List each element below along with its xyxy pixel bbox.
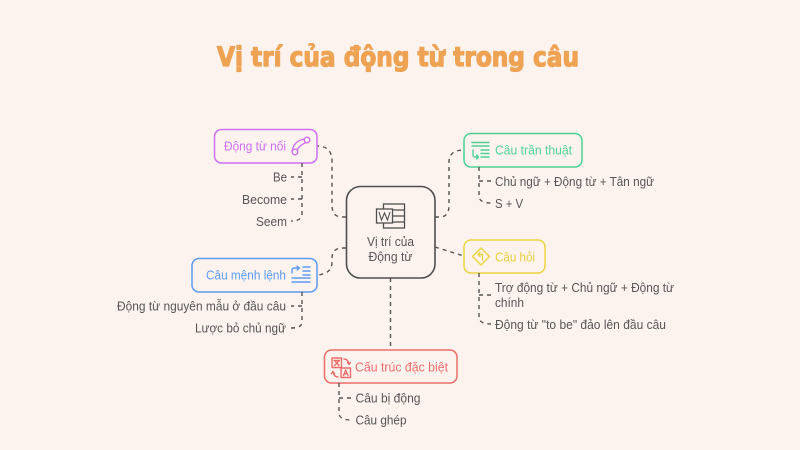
heading: Cấu trúc đặc biệt: Cấu trúc đặc biệt [355,360,448,374]
panel: Cấu trúc đặc biệt [324,350,457,428]
icon: curve [292,137,310,155]
central label: Động từ [368,249,413,264]
item: Chủ ngữ + Động từ + Tân ngữ: Chủ ngữ + Động từ + Tân ngữ [495,174,654,189]
panel: Câu mệnh lệnh [117,258,317,336]
connector: Câu hỏi items [479,273,491,324]
icon: translate [332,358,350,378]
icon: list with arrow [292,266,310,282]
item: S + V: S + V [495,196,523,211]
item: Be: Be [273,170,287,184]
item: Câu bị động: Câu bị động [356,390,420,406]
central node [346,186,435,278]
item: Động từ "to be" đảo lên đầu câu: Động từ "to be" đảo lên đầu câu [495,317,666,332]
heading: Câu mệnh lệnh: Câu mệnh lệnh [206,268,286,282]
connector: Động từ nối items [291,163,302,221]
heading: Câu trần thuật: Câu trần thuật [495,142,572,158]
connectors: centre to branches [317,146,464,350]
central label: Vị trí của [367,234,415,249]
panel: Câu hỏi [464,240,674,332]
item: Become: Become [242,192,287,207]
connector: Cấu trúc đặc biệt items [339,383,351,420]
connector: Câu mệnh lệnh items [291,292,302,328]
item: Lược bỏ chủ ngữ: Lược bỏ chủ ngữ [195,320,286,336]
icon: word document [376,204,404,228]
item: Trợ động từ + Chủ ngữ + Động từ chính: chính [495,295,524,310]
icon: text lines [472,142,489,159]
item: Động từ nguyên mẫu ở đầu câu: Động từ nguyên mẫu ở đầu câu [117,298,286,314]
central label [367,234,415,264]
item: Trợ động từ + Chủ ngữ + Động từ chính: Trợ động từ + Chủ ngữ + Động từ [495,280,674,295]
panel: Động từ nối [214,130,317,229]
heading: Động từ nối: Động từ nối [224,138,286,154]
connector: Câu trần thuật items [479,167,491,203]
title: Vị trí của động từ trong câu [217,42,579,73]
panel: Câu trần thuật [464,134,654,211]
item: Câu ghép: Câu ghép [356,412,406,428]
item: Seem: Seem [256,214,287,229]
heading: Câu hỏi: Câu hỏi [495,250,535,264]
icon: road sign [472,248,490,265]
item: Trợ động từ + Chủ ngữ + Động từ chính [495,280,674,310]
